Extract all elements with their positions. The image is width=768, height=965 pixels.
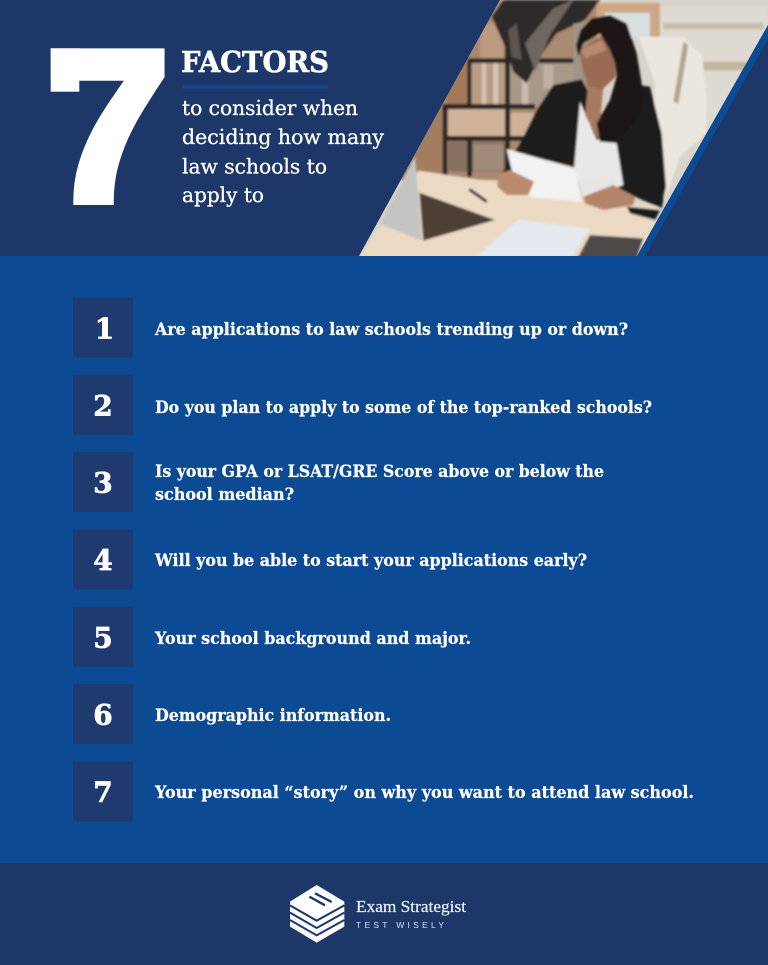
footer panel [0,863,768,965]
factor 1: 1 [95,312,114,346]
accent stripe [637,25,768,256]
factor 5: 5 [93,622,113,654]
subtitle: law schools to [182,154,327,178]
title underline [182,86,328,88]
factor 7: Your personal “story” on why you want to attend law school. [154,783,694,803]
factor 5 [73,607,471,667]
factor 2: 2 [93,390,113,422]
factor 3 [73,452,604,512]
subtitle: deciding how many [182,125,384,149]
factor 3: Is your GPA or LSAT/GRE Score above or below the [155,462,604,482]
icon: stacked books logo [290,885,344,943]
factor 4 [73,530,587,590]
factor 6: 6 [93,698,113,732]
factor 1: Are applications to law schools trending up or down? [154,320,628,340]
brand name: Exam Strategist [356,897,466,916]
factor 6: Demographic information. [155,706,391,726]
factor 1 [73,298,628,358]
main factors panel [0,256,768,863]
factor 4: 4 [93,544,113,577]
factor 2: Do you plan to apply to some of the top-ranked schools? [155,398,652,418]
subtitle [182,96,384,207]
factor 3: 3 [93,466,113,500]
factor 6 [73,684,391,744]
header panel [0,0,768,258]
factor 7 [73,762,694,822]
subtitle: apply to [182,183,264,207]
factor 7: 7 [93,776,113,809]
factor 2 [73,375,652,435]
title: FACTORS: FACTORS [181,45,329,79]
factor 3: school median? [155,485,294,505]
factor 4: Will you be able to start your applications early? [154,551,587,571]
tagline: TEST WISELY [356,920,444,930]
factor 5: Your school background and major. [154,629,471,649]
photo: woman reviewing papers at desk [340,0,768,258]
big number 7: 7 [45,5,170,247]
subtitle: to consider when [182,96,358,120]
